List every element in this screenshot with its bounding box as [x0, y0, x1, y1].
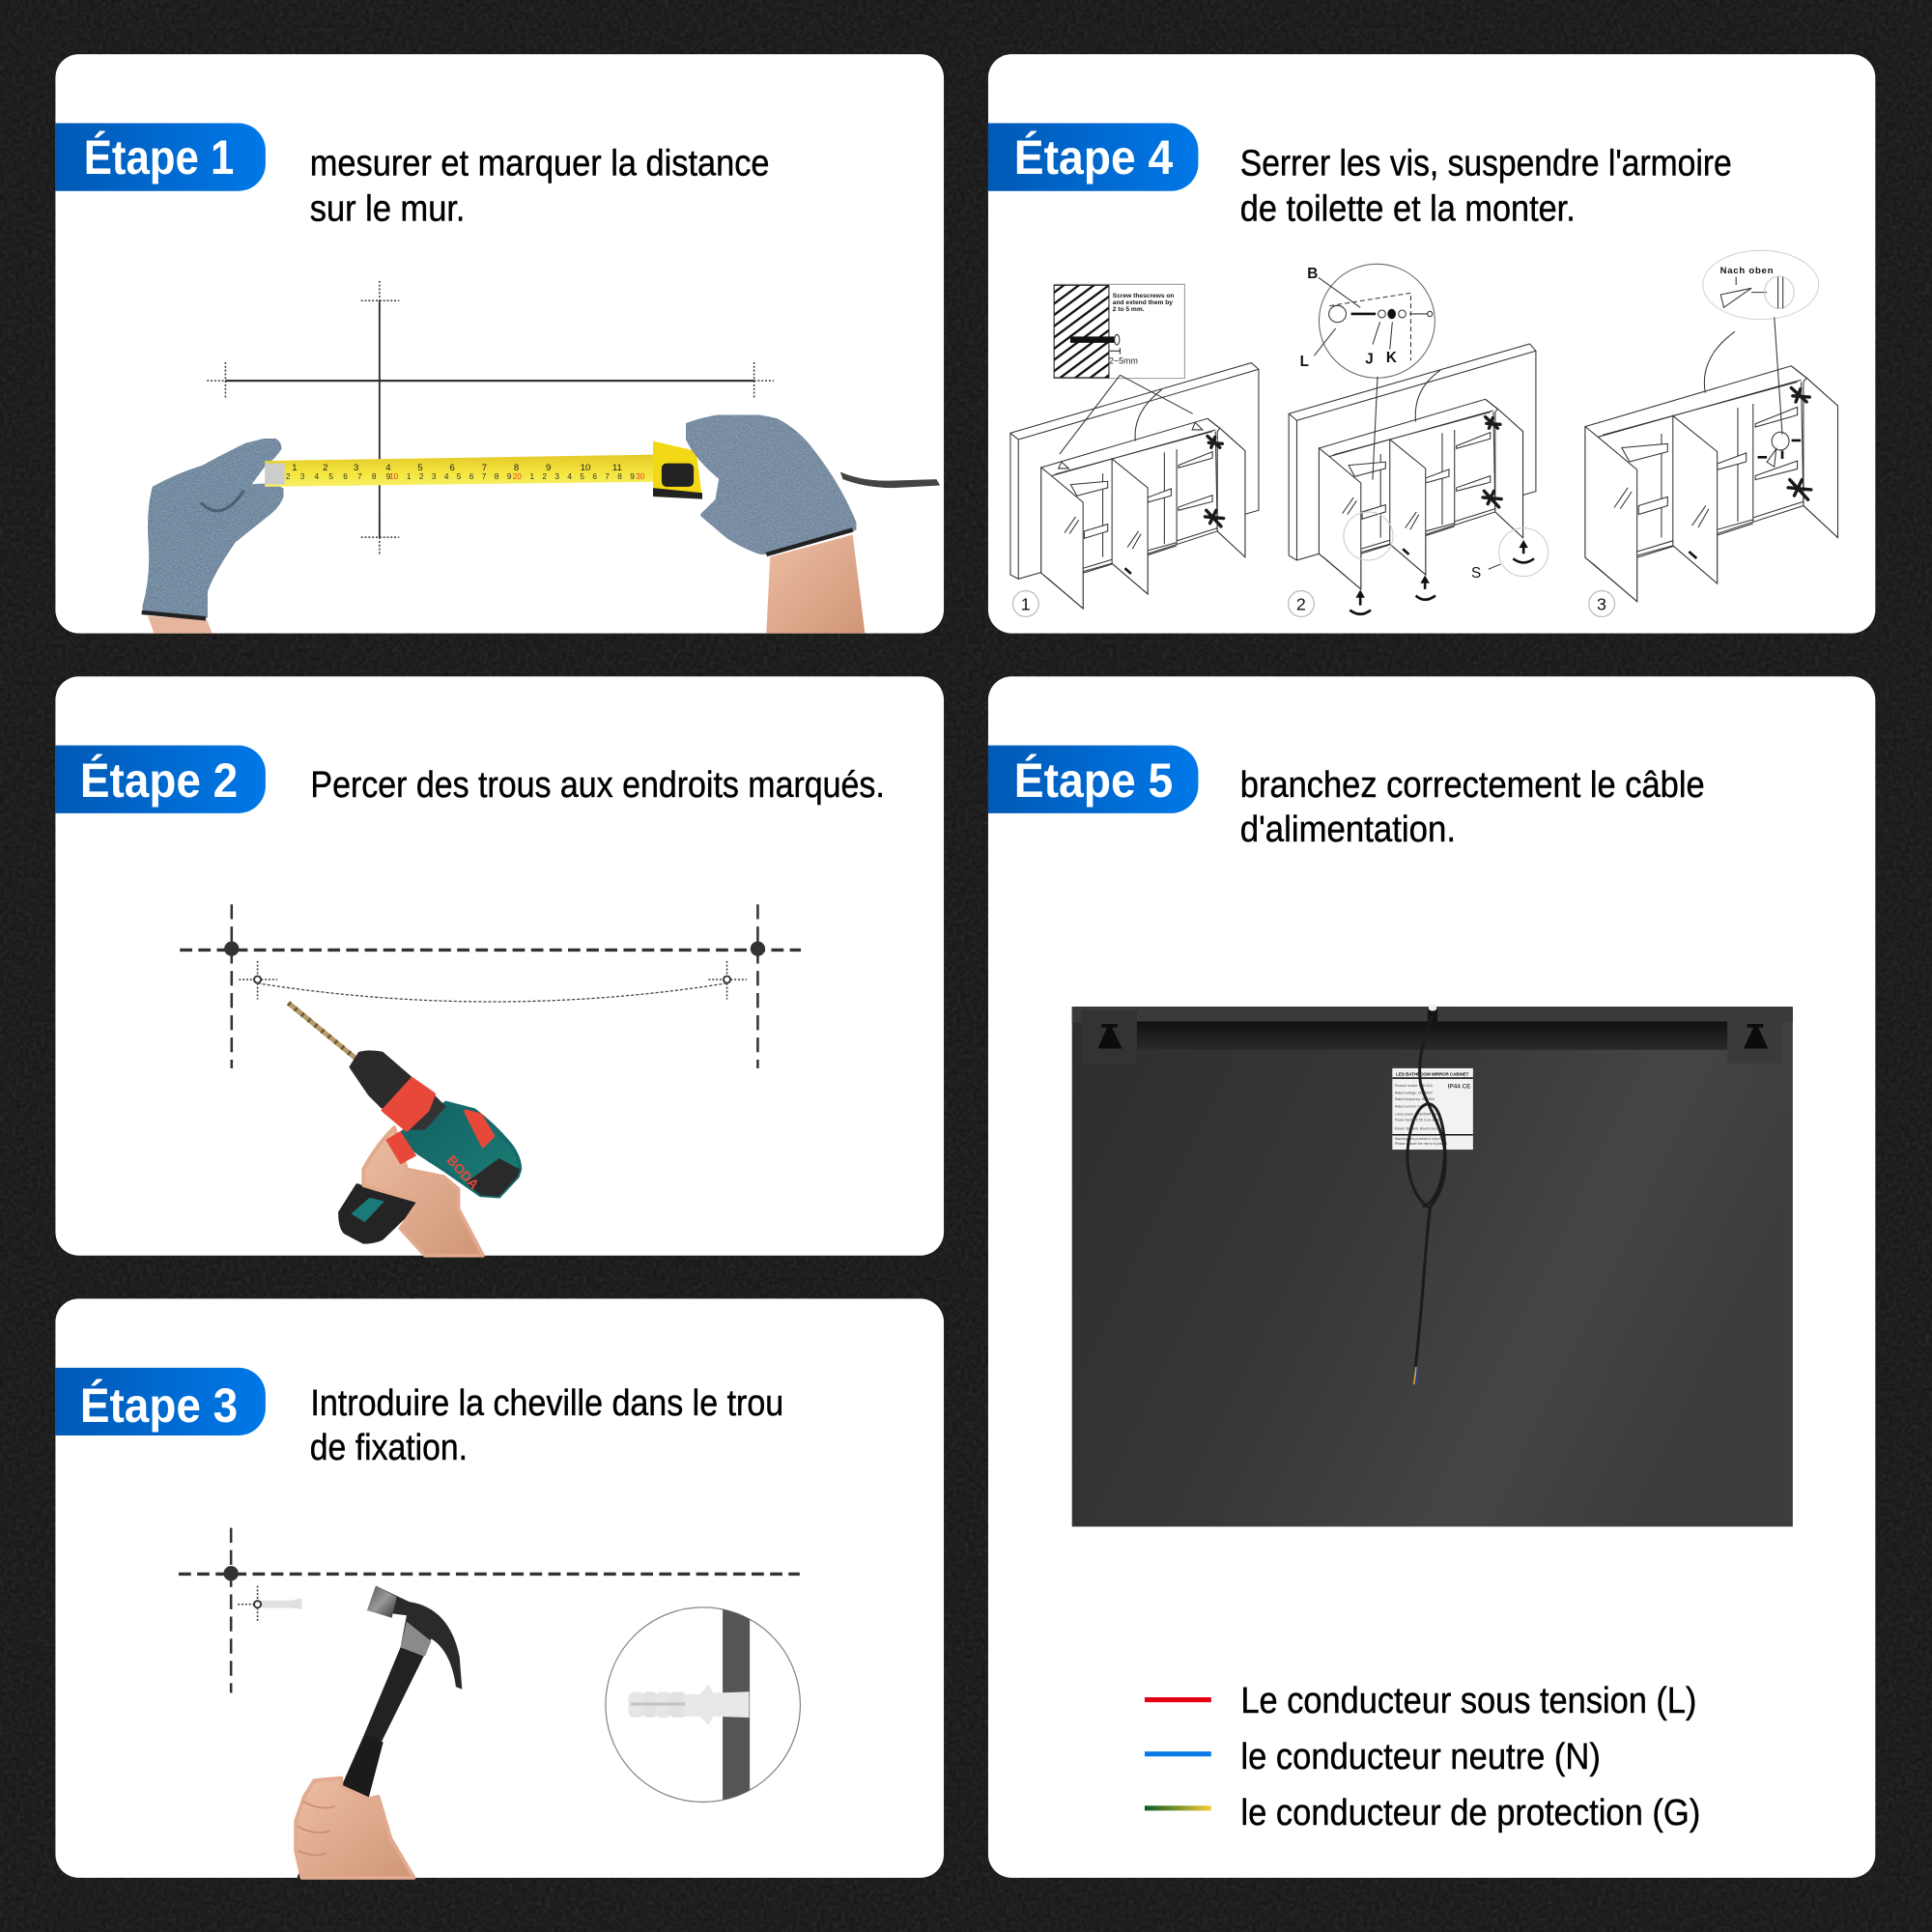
live conductor: Le conducteur sous tension (L) — [1240, 1680, 1696, 1721]
badge: étape 4: Étape 4 — [1014, 130, 1174, 185]
badge: étape 2 — [55, 746, 266, 813]
photo: tape measure: 9 — [546, 463, 551, 473]
inset: dowel in wall — [606, 1602, 800, 1811]
badge: étape 1 — [55, 124, 266, 191]
instruction text: mesurer et marquer la distance — [310, 143, 770, 185]
photo: tape measure: 10 — [389, 471, 399, 481]
badge: étape 3 — [55, 1368, 266, 1435]
product label: Lamp power: 24W/50W (LED) — [1395, 1112, 1440, 1116]
instruction text — [1240, 764, 1705, 850]
product label — [1392, 1068, 1473, 1150]
instruction text: branchez correctement le câble — [1240, 764, 1705, 806]
photo: drill in hand: BODA — [444, 1152, 482, 1192]
product label: Warning: this product is only for — [1395, 1137, 1443, 1141]
instruction text — [1240, 143, 1732, 229]
photo: tape measure: 8 — [514, 463, 519, 473]
photo: tape measure: 2 3 4 5 6 7 8 9 — [286, 471, 391, 481]
diagram 1: fix wall screws — [1010, 284, 1259, 616]
panel: étape 5 — [988, 676, 1875, 1878]
icon: left keyhole — [1097, 1024, 1122, 1048]
photo: right gloved hand — [686, 415, 940, 634]
photo: tape measure: 11 — [612, 463, 622, 473]
panel: étape 4 — [988, 54, 1875, 634]
diagram 2: screws and adjusters: B — [1307, 266, 1318, 282]
card — [55, 676, 944, 1256]
panel: étape 3 — [55, 1298, 944, 1878]
photo: tape measure: 1 2 3 4 5 6 7 8 9 — [529, 471, 635, 481]
photo: tape measure: 2 — [323, 463, 327, 473]
card — [55, 1298, 944, 1878]
photo: tape measure: 1 2 3 4 5 6 7 8 9 — [407, 471, 512, 481]
photo: tape measure: 4 — [385, 463, 391, 473]
product label: Product model: MBC010 — [1395, 1084, 1433, 1088]
panel: étape 1 — [55, 54, 944, 634]
photo: hammer in hand — [296, 1586, 462, 1878]
dowel placement diagram — [179, 1528, 800, 1693]
instruction text: sur le mur. — [310, 187, 466, 229]
legend — [1145, 1680, 1700, 1833]
photo: tape measure: 6 — [450, 463, 455, 473]
diagram 1: fix wall screws: 2 to 5 mm. — [1113, 306, 1145, 313]
diagram 1: fix wall screws: 1 — [1021, 594, 1031, 613]
cabinet back view — [1072, 1005, 1793, 1526]
product label: Please ensure the mirror is placed — [1395, 1142, 1447, 1146]
icon: right keyhole — [1744, 1024, 1768, 1048]
badge: étape 3: Étape 3 — [80, 1378, 238, 1433]
marking diagram — [207, 281, 774, 555]
instruction text: de toilette et la monter. — [1240, 187, 1576, 229]
instruction text — [310, 143, 770, 229]
diagram 3: hang cabinet: 3 — [1597, 594, 1606, 613]
photo: tape measure — [265, 441, 702, 499]
product label: Rated voltage: 110-240V — [1395, 1092, 1434, 1095]
product label: Power: Brown/L Blue/N Green/E — [1395, 1127, 1444, 1131]
photo: left gloved hand — [142, 439, 283, 634]
photo: tape measure: 3 — [354, 463, 358, 473]
diagram 1: fix wall screws: 2~5mm — [1109, 355, 1138, 365]
badge: étape 5 — [988, 746, 1198, 813]
instruction text: Introduire la cheville dans le trou — [310, 1382, 783, 1424]
drilling diagram — [180, 904, 801, 1068]
instruction text: de fixation. — [310, 1427, 468, 1468]
instruction text: d'alimentation. — [1240, 809, 1456, 850]
product label: IP44 CE — [1448, 1083, 1470, 1090]
card — [988, 676, 1875, 1878]
photo: tape measure: 1 — [292, 463, 298, 473]
diagram 2: screws and adjusters: J — [1365, 351, 1374, 367]
photo: tape measure: 30 — [636, 471, 645, 481]
diagram 2: screws and adjusters: K — [1386, 350, 1397, 366]
diagram 1: fix wall screws: Screw thescrews on — [1113, 293, 1174, 299]
card — [988, 54, 1875, 634]
product label: Rated frequency: 50/60Hz — [1395, 1097, 1435, 1101]
protective conductor: le conducteur de protection (G) — [1240, 1792, 1700, 1833]
photo: tape measure: 5 — [417, 463, 423, 473]
photo: tape measure: 10 — [581, 463, 590, 473]
diagram 2: screws and adjusters: S — [1471, 565, 1481, 582]
badge: étape 2: Étape 2 — [80, 753, 238, 808]
photo: drill in hand — [288, 1003, 520, 1256]
diagram 2: screws and adjusters — [1289, 264, 1548, 616]
instruction text: Percer des trous aux endroits marqués. — [310, 764, 885, 806]
diagram 3: hang cabinet: Nach oben — [1720, 266, 1774, 276]
diagram 2: screws and adjusters: 2 — [1296, 594, 1306, 613]
photo: tape measure: 20 — [513, 471, 522, 481]
diagram 2: screws and adjusters: L — [1300, 354, 1309, 370]
diagram 1: fix wall screws: and extend them by — [1113, 299, 1173, 306]
product label: Power factor: 0.55 Cool white — [1395, 1119, 1439, 1122]
card — [55, 54, 944, 634]
instruction text: Serrer les vis, suspendre l'armoire — [1240, 143, 1732, 185]
product label: LED BATHROOM MIRROR CABINET — [1396, 1072, 1469, 1077]
instruction text — [310, 1382, 783, 1468]
power cable — [1407, 1016, 1445, 1384]
badge: étape 4 — [988, 124, 1198, 191]
product label: Rated current: 0.5A — [1395, 1105, 1425, 1109]
neutral conductor: le conducteur neutre (N) — [1240, 1736, 1601, 1777]
panel: étape 2 — [55, 676, 944, 1256]
badge: étape 1: Étape 1 — [84, 130, 234, 185]
diagram 3: hang cabinet — [1585, 250, 1837, 616]
photo: tape measure: 7 — [482, 463, 487, 473]
badge: étape 5: Étape 5 — [1014, 753, 1173, 808]
